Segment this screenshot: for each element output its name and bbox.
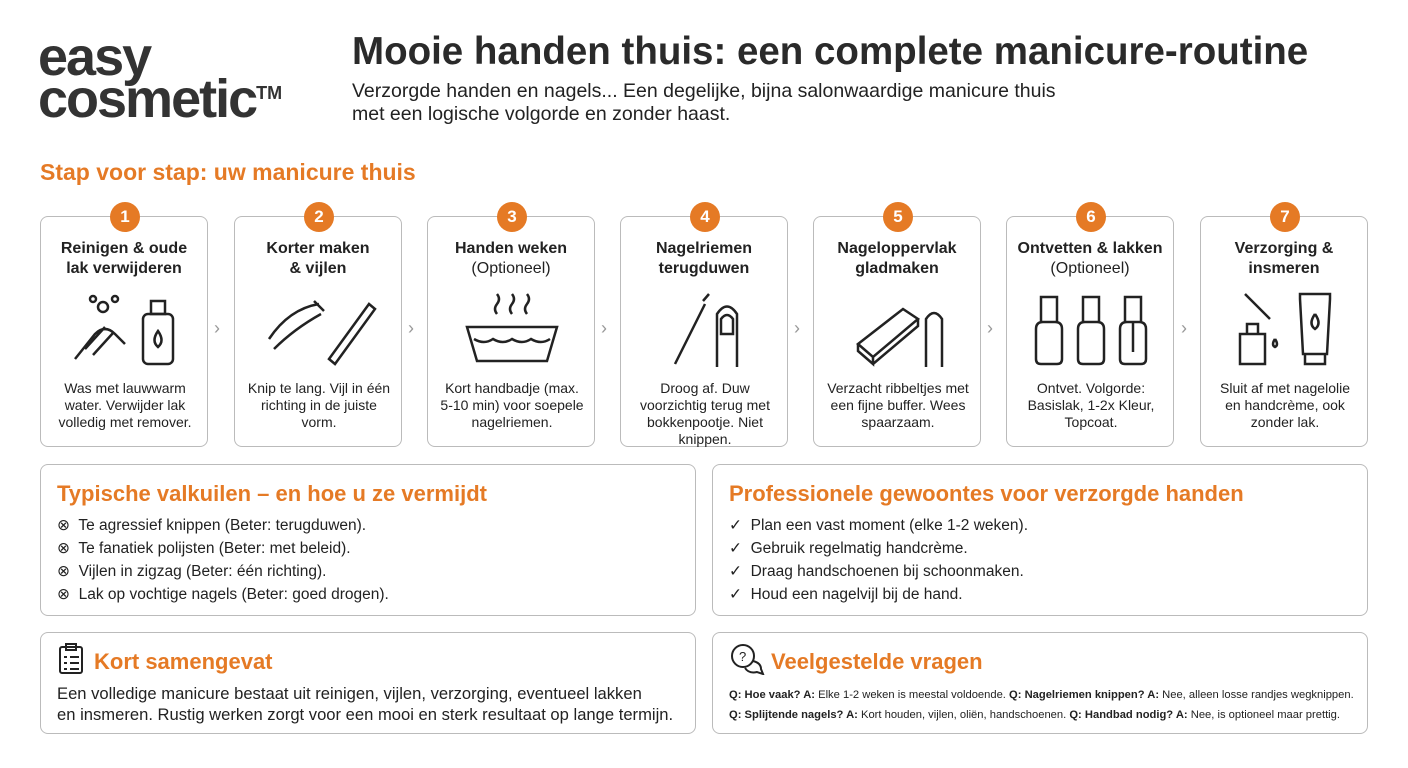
- icon: pusher and finger: [674, 293, 738, 367]
- pitfalls list: ⊗ Te agressief knippen (Beter: terugduwen).: [57, 517, 366, 534]
- step 7: Sluit af met nagelolie en handcrème, ook zonder lak.: [1220, 380, 1350, 430]
- step 6: Ontvetten & lakken: [1018, 240, 1162, 257]
- step 6: (Optioneel): [1050, 260, 1130, 277]
- icon: nipper and file: [268, 300, 377, 366]
- subtitle: [352, 80, 1056, 125]
- habits heading: Professionele gewoontes voor verzorgde handen: [729, 481, 1244, 506]
- title: Mooie handen thuis: een complete manicure-routine: [352, 30, 1308, 73]
- step 7: insmeren: [1248, 260, 1320, 277]
- arrow: ›: [1181, 318, 1187, 338]
- step 3: Kort handbadje (max. 5-10 min) voor soepele nagelriemen.: [440, 380, 584, 430]
- step 7: 7: [1280, 207, 1290, 226]
- icon: hand washing and bottle: [74, 294, 174, 366]
- FAQ heading: Veelgestelde vragen: [771, 649, 983, 674]
- summary text: Een volledige manicure bestaat uit reinigen, vijlen, verzorging, eventueel lakken: [57, 684, 642, 703]
- icon: oil dropper and tube: [1238, 292, 1332, 366]
- panel: summary: [40, 632, 696, 734]
- habits list: [729, 517, 1028, 603]
- step 1: [40, 216, 208, 447]
- step 4: 4: [700, 207, 710, 226]
- step 3: 3: [507, 207, 517, 226]
- logo: cosmeticTM: [38, 69, 282, 129]
- icon: three polish bottles: [1034, 296, 1148, 366]
- step 1: 1: [120, 207, 130, 226]
- step 7: Verzorging &: [1235, 240, 1333, 257]
- step 6: [1006, 216, 1174, 447]
- step 3: (Optioneel): [471, 260, 551, 277]
- pitfalls list: ⊗ Vijlen in zigzag (Beter: één richting).: [57, 563, 326, 580]
- icon: clipboard: [59, 643, 83, 674]
- icon: buffer block: [856, 308, 944, 367]
- step 1: Reinigen & oude: [61, 240, 187, 257]
- section heading: Stap voor stap: uw manicure thuis: [40, 159, 416, 185]
- pitfalls list: ⊗ Lak op vochtige nagels (Beter: goed drogen).: [57, 586, 389, 603]
- icon: bowl: [465, 293, 559, 362]
- step 5: [813, 216, 981, 447]
- step 5: 5: [893, 207, 903, 226]
- arrow: ›: [601, 318, 607, 338]
- logo: [38, 27, 282, 129]
- panel: pitfalls: [40, 464, 696, 616]
- step 2: & vijlen: [290, 260, 346, 277]
- step 7: [1200, 216, 1368, 447]
- FAQ text: Q: Hoe vaak? A: Elke 1-2 weken is meestal voldoende. Q: Nagelriemen knippen? A: Nee, alleen losse randjes wegknippen.: [729, 689, 1354, 701]
- step 2: 2: [314, 207, 324, 226]
- arrow: ›: [408, 318, 414, 338]
- summary heading: Kort samengevat: [94, 649, 273, 674]
- icon: speech bubbles: [731, 644, 764, 675]
- habits list: ✓ Houd een nagelvijl bij de hand.: [729, 586, 963, 603]
- summary text: [57, 684, 673, 724]
- pitfalls list: ⊗ Te fanatiek polijsten (Beter: met beleid).: [57, 540, 351, 557]
- step 3: Handen weken: [455, 240, 567, 257]
- step 5: Nageloppervlak: [837, 240, 957, 257]
- subtitle: met een logische volgorde en zonder haast.: [352, 103, 730, 125]
- step 1: lak verwijderen: [66, 260, 182, 277]
- habits list: ✓ Plan een vast moment (elke 1-2 weken).: [729, 517, 1028, 534]
- habits list: ✓ Draag handschoenen bij schoonmaken.: [729, 563, 1024, 580]
- step 2: [234, 216, 402, 447]
- step 1: Was met lauwwarm water. Verwijder lak volledig met remover.: [58, 380, 192, 430]
- panel: habits: [712, 464, 1368, 616]
- habits list: ✓ Gebruik regelmatig handcrème.: [729, 540, 968, 557]
- step 4: terugduwen: [659, 260, 749, 277]
- pitfalls heading: Typische valkuilen – en hoe u ze vermijdt: [57, 481, 487, 506]
- step 2: Knip te lang. Vijl in één richting in de juiste vorm.: [248, 380, 390, 430]
- logo: easy: [38, 27, 150, 87]
- step 2: Korter maken: [266, 240, 370, 257]
- FAQ text: [729, 689, 1354, 721]
- panel: FAQ: [712, 632, 1368, 734]
- pitfalls list: [57, 517, 389, 603]
- step 3: [427, 216, 595, 447]
- FAQ text: Q: Splijtende nagels? A: Kort houden, vijlen, oliën, handschoenen. Q: Handbad nodig? A: Nee, is optioneel maar prettig.: [729, 709, 1340, 721]
- step 4: Nagelriemen: [656, 240, 752, 257]
- step 4: [620, 216, 788, 447]
- arrow: ›: [987, 318, 993, 338]
- icon: speech bubbles: ?: [739, 649, 746, 664]
- arrow: ›: [794, 318, 800, 338]
- step 4: Droog af. Duw voorzichtig terug met bokkenpootje. Niet knippen.: [640, 380, 770, 447]
- step 5: Verzacht ribbeltjes met een fijne buffer. Wees spaarzaam.: [827, 380, 969, 430]
- step 5: gladmaken: [855, 260, 939, 277]
- summary text: en insmeren. Rustig werken zorgt voor een mooi en sterk resultaat op lange termijn.: [57, 705, 673, 724]
- step 6: 6: [1086, 207, 1096, 226]
- arrow: ›: [214, 318, 220, 338]
- step 6: Ontvet. Volgorde: Basislak, 1-2x Kleur, Topcoat.: [1028, 380, 1154, 430]
- subtitle: Verzorgde handen en nagels... Een degelijke, bijna salonwaardige manicure thuis: [352, 80, 1056, 102]
